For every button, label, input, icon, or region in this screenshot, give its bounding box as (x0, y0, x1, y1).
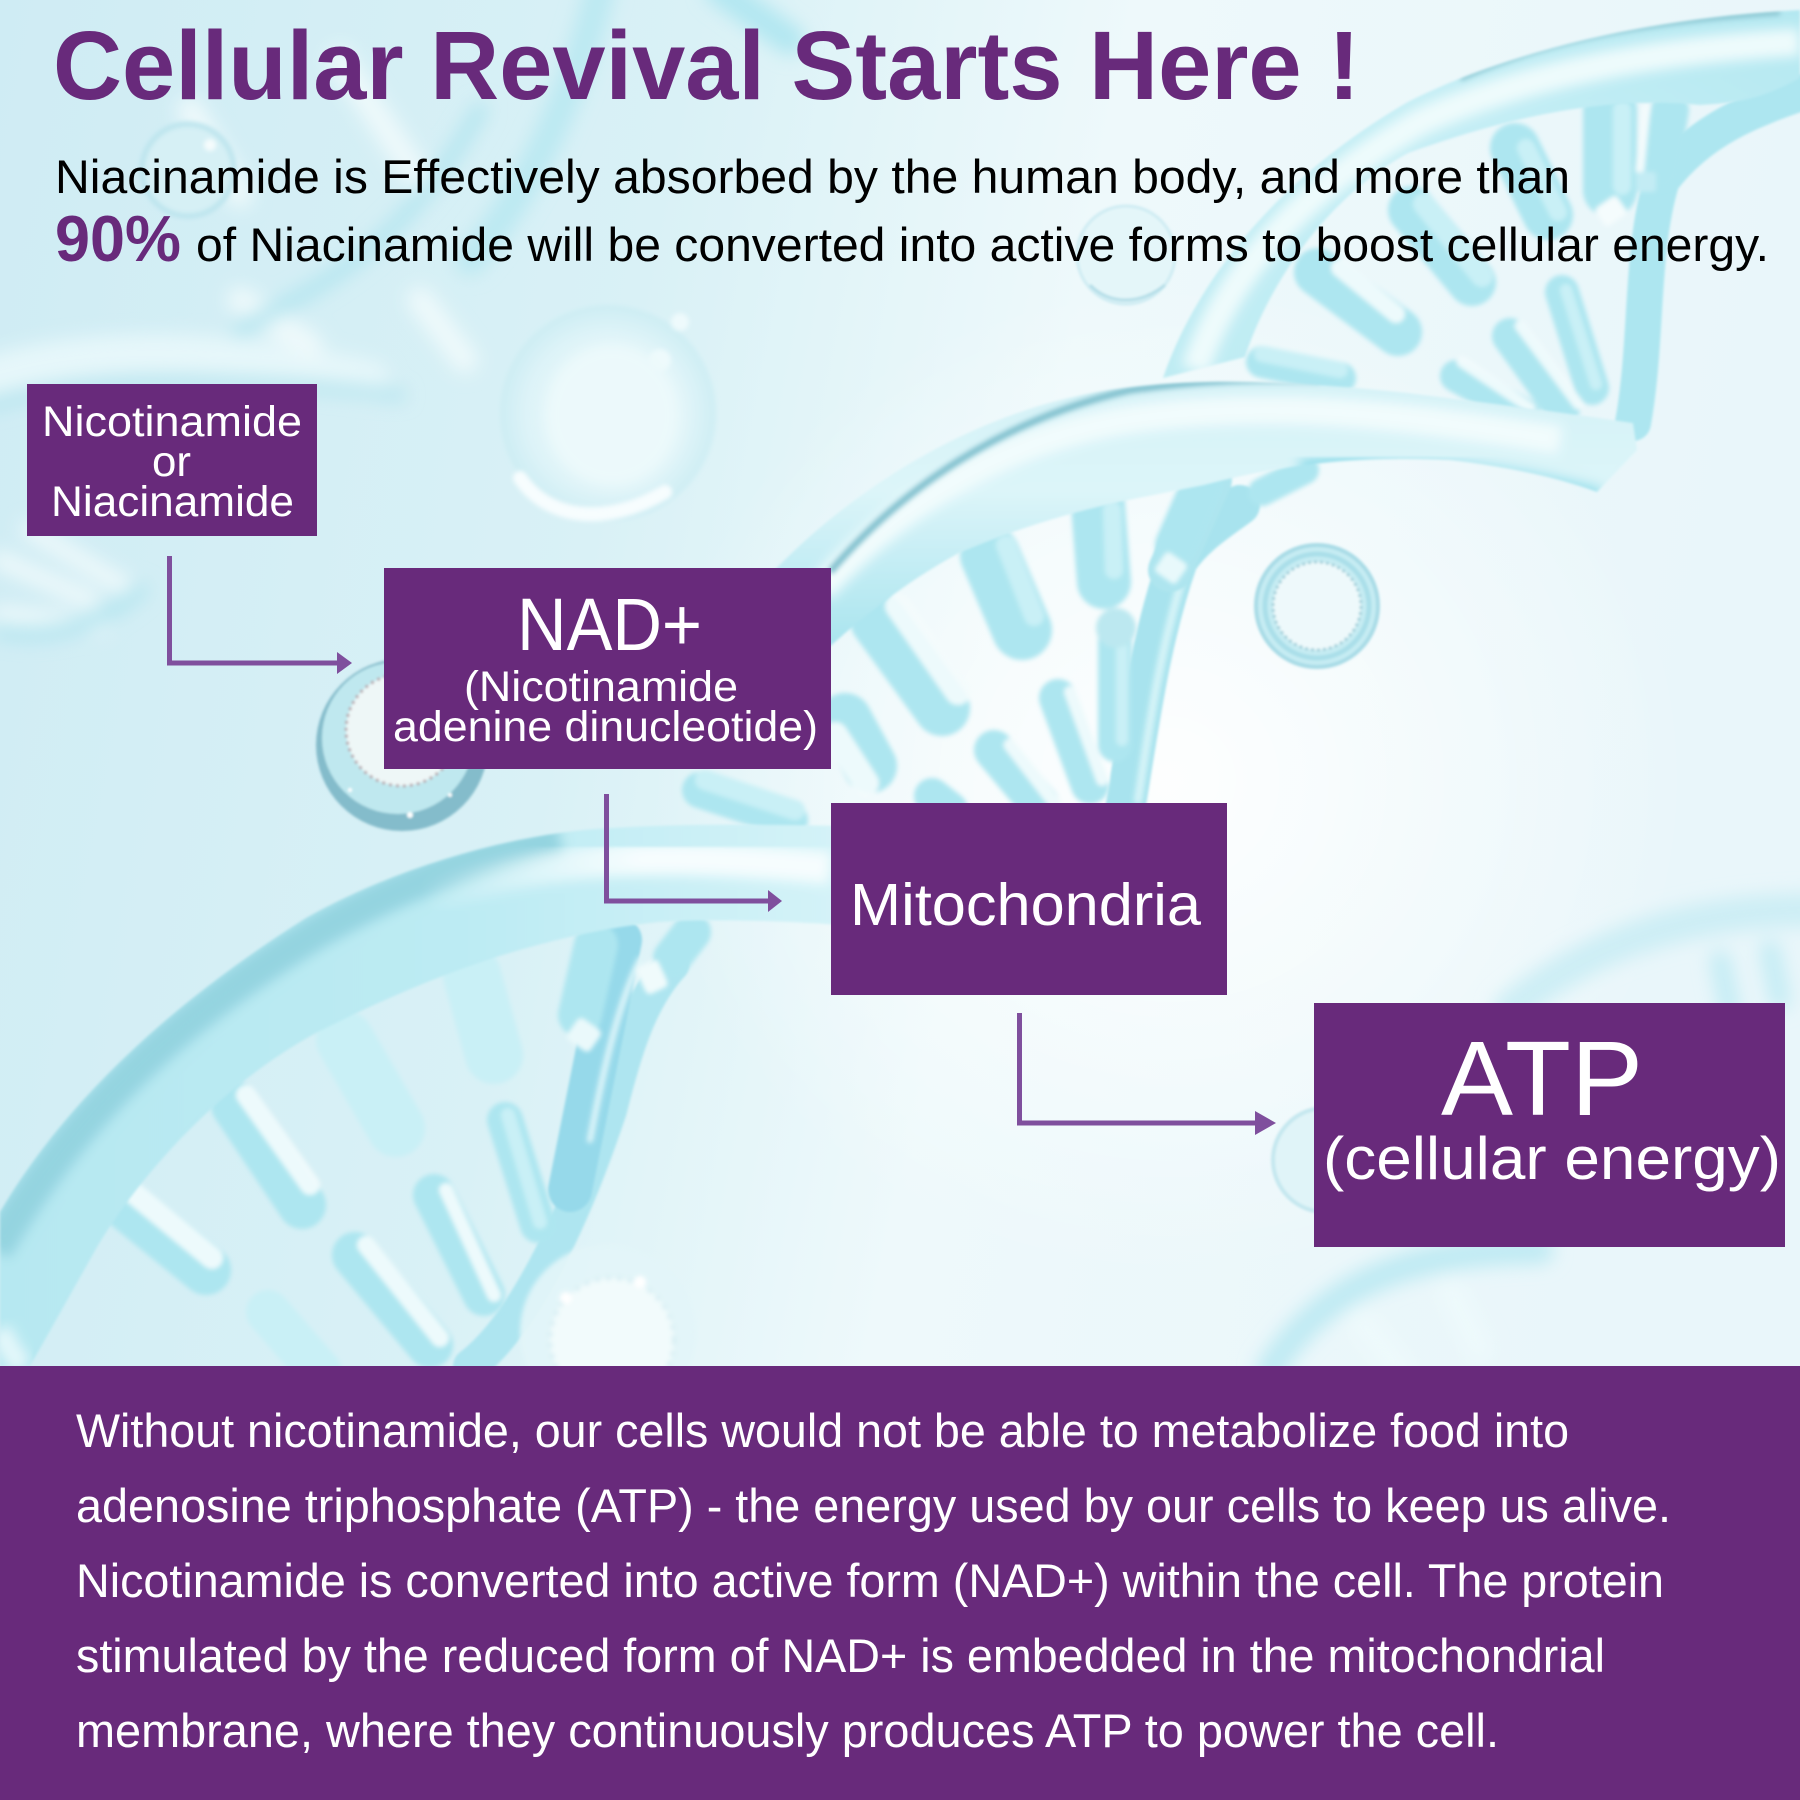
title: Cellular Revival Starts Here ! (53, 11, 1360, 120)
bubble: behind ATP box (1273, 1108, 1377, 1212)
intro line 2: of Niacinamide will be converted into active forms to boost cellular energy. (196, 218, 1769, 271)
flow box: NAD+ (384, 568, 831, 769)
intro text (55, 150, 1769, 275)
explanation text: Without nicotinamide, our cells would not be able to metabolize food into (76, 1404, 1569, 1457)
rungs: upper right (1262, 108, 1670, 414)
explanation text: stimulated by the reduced form of NAD+ is embedded in the mitochondrial (76, 1629, 1605, 1682)
rungs: centre (700, 470, 1305, 820)
flow box: Nicotinamide or Niacinamide (27, 384, 317, 536)
bubble: under intro text (1077, 206, 1175, 304)
bubble: large blurred top left (500, 305, 716, 521)
arrow: to Mitochondria (606, 794, 782, 912)
bubble: behind NAD+ box (316, 659, 488, 831)
bubble: bottom of helix (520, 1244, 696, 1420)
arrow: to ATP (1020, 1013, 1276, 1135)
bubble: small blurred top left (142, 124, 234, 216)
flow box: ATP: (cellular energy) (1323, 1125, 1781, 1192)
explanation text (76, 1404, 1671, 1757)
flow box: ATP (1314, 1003, 1785, 1247)
strand: centre (770, 379, 1637, 655)
blurred helices in the distance (0, 0, 1800, 1370)
flow box: Mitochondria: Mitochondria (850, 872, 1201, 938)
bubble: right of helix (1256, 545, 1378, 667)
strand: lower left (0, 825, 840, 1366)
flow box: Nicotinamide or Niacinamide: or (152, 438, 191, 486)
intro line 1: Niacinamide is Effectively absorbed by the human body, and more than (55, 150, 1570, 203)
flow box: ATP: ATP (1441, 1020, 1643, 1138)
flow box: NAD+: NAD+ (517, 583, 702, 666)
panel: explanation (0, 1366, 1800, 1800)
flow box: Nicotinamide or Niacinamide: Niacinamide (51, 478, 294, 526)
stat: 90%: 90% (55, 202, 181, 275)
back strand lower left (470, 940, 672, 1366)
rungs: lower left (120, 932, 692, 1372)
flow box: NAD+: adenine dinucleotide) (393, 703, 818, 751)
flow box: Nicotinamide or Niacinamide: Nicotinamide (42, 398, 302, 446)
strand: upper right (1163, 10, 1800, 378)
flow box: NAD+: (Nicotinamide (464, 663, 738, 711)
back strand upper right (1633, 90, 1800, 423)
explanation text: membrane, where they continuously produces ATP to power the cell. (76, 1704, 1499, 1757)
explanation text: adenosine triphosphate (ATP) - the energy used by our cells to keep us alive. (76, 1479, 1671, 1532)
arrow: to NAD+ (170, 556, 352, 674)
background (0, 0, 1800, 1420)
back strand centre (1125, 480, 1240, 810)
explanation text: Nicotinamide is converted into active form (NAD+) within the cell. The protein (76, 1554, 1664, 1607)
flow box: Mitochondria (831, 803, 1227, 995)
